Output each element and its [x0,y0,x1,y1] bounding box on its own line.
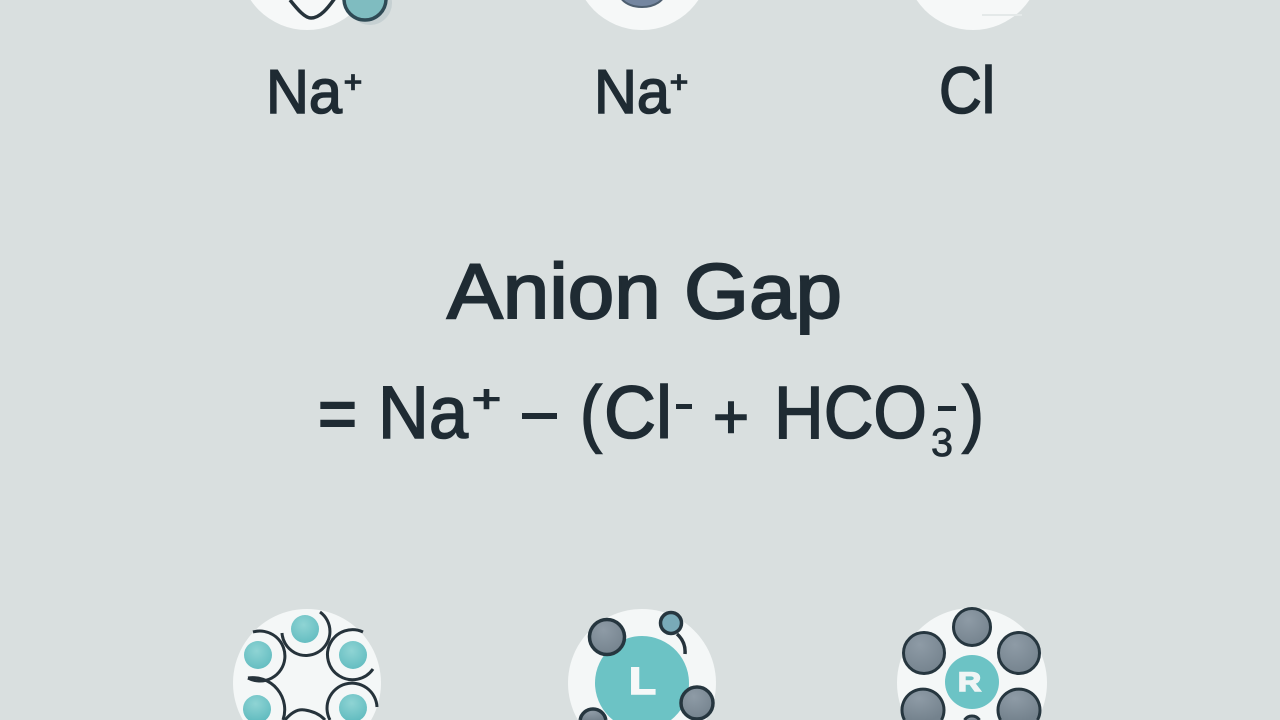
letter L: L [629,661,656,703]
label: Na+ left: + [344,66,362,99]
label: Na+ centre: + [670,66,688,99]
formula: anion gap equation: ) [962,371,984,454]
formula: anion gap equation: + [713,383,749,452]
label: Na+ left: Na [266,58,342,127]
formula: anion gap equation: Cl [604,371,672,454]
formula: anion gap equation [318,371,984,465]
heading: Anion Gap: Anion Gap [447,247,842,335]
formula: anion gap equation: = [318,374,357,454]
formula: anion gap equation: HCO [774,371,927,454]
letter R: R [958,667,981,697]
icon: top right ion circle [905,0,1041,30]
icon: top left ion circle [239,0,392,30]
label: Na+ centre: Na [594,58,670,127]
formula: anion gap equation: Na [378,371,469,454]
icon: bottom left ring of teal ions [233,609,381,720]
icon: bottom right ring of grey ions [897,608,1047,720]
formula: anion gap equation: ( [580,371,602,454]
label: Cl: Cl [939,53,995,127]
icon: top centre ion circle [574,0,710,30]
formula: anion gap equation: + [472,379,501,421]
icon: bottom centre lactate circle [568,609,716,720]
formula: anion gap equation: 3 [931,421,953,465]
